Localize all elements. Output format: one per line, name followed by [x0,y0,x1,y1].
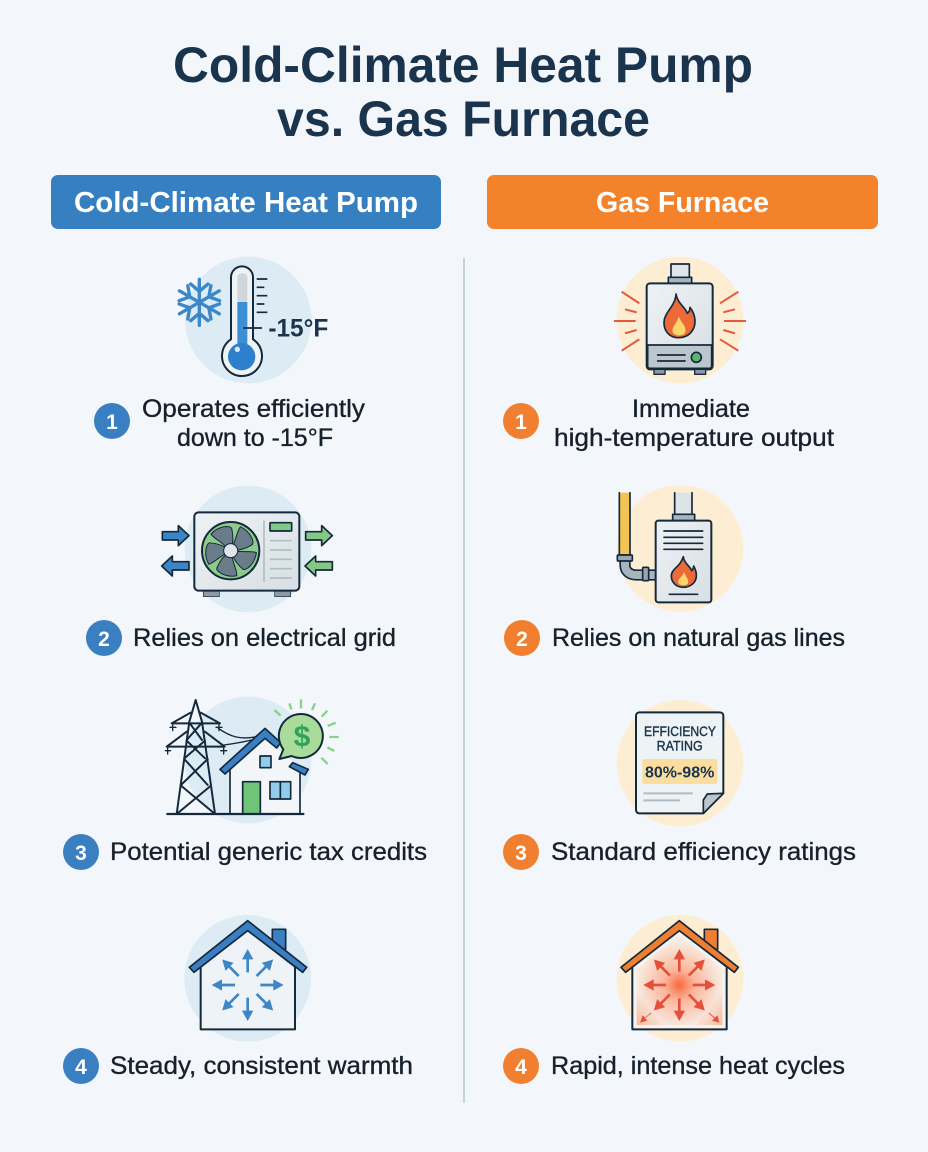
step 2 label: Relies on electrical grid [133,624,396,652]
step 2 label [86,620,396,656]
icon: efficiency rating document: 80%-98% [645,764,714,781]
panel: gas furnace column [487,175,878,1084]
icon: house [220,728,308,814]
icon: efficiency rating document: RATING [657,739,703,754]
step 2 label [504,620,845,656]
icon: flame [664,294,695,338]
icon: efficiency rating document [617,700,743,827]
icon: house with steady blue warmth arrows [184,915,311,1042]
step 1 label [94,395,366,452]
icon: thermometer at -15°F with snowflake: -15°F [268,316,328,343]
icon: snowflake [175,279,224,325]
icon: fan [202,522,261,582]
step 2 label: Relies on natural gas lines [552,624,845,652]
icon: radiating arrows [212,949,284,1021]
step 1 label: 1 [515,411,527,434]
icon: thermometer at -15°F with snowflake [175,257,328,383]
step 1 label: 1 [106,411,118,434]
icon: gas line feeding furnace [617,485,743,612]
panel: cold-climate heat pump column [51,175,441,1084]
step 3 label [63,834,427,870]
step 4 label: Rapid, intense heat cycles [551,1052,845,1080]
step 1 label: high-temperature output [554,424,834,452]
heading: gas furnace: Gas Furnace [596,187,769,219]
icon: house with intense red heat arrows [617,915,743,1042]
step 2 label: 2 [516,628,528,651]
step 1 label: down to -15°F [177,424,333,452]
icon: radiating arrows [640,949,719,1023]
step 3 label: 3 [515,842,527,865]
step 4 label: 4 [515,1056,527,1079]
icon: dollar speech bubble: $ [294,721,311,754]
icon: efficiency rating document: EFFICIENCY [644,724,716,739]
step 3 label: Standard efficiency ratings [551,838,856,866]
icon: dollar speech bubble [274,699,339,764]
step 4 label [63,1048,413,1084]
icon: transmission tower [165,700,258,814]
step 1 label [503,395,834,452]
icon: furnace with flame and heat rays [614,257,746,383]
step 3 label: Potential generic tax credits [110,838,427,866]
heading: cold-climate heat pump: Cold-Climate Heat Pump [74,187,418,219]
step 4 label: Steady, consistent warmth [110,1052,413,1080]
step 1 label: Immediate [632,395,750,423]
column divider [463,258,465,1103]
step 4 label [503,1048,845,1084]
title: Cold-Climate Heat Pump [173,37,753,93]
icon: outdoor heat pump unit with airflow arrows [162,486,332,612]
icon: flame [671,557,696,587]
icon: power tower, house and tax credit bubble [165,697,339,823]
step 3 label: 3 [75,842,87,865]
step 2 label: 2 [98,628,110,651]
step 4 label: 4 [75,1056,87,1079]
step 3 label [503,834,856,870]
heading: gas furnace [487,175,878,229]
step 1 label: Operates efficiently [142,395,366,423]
title: vs. Gas Furnace [277,91,650,147]
title [173,37,753,147]
heading: cold-climate heat pump [51,175,441,229]
